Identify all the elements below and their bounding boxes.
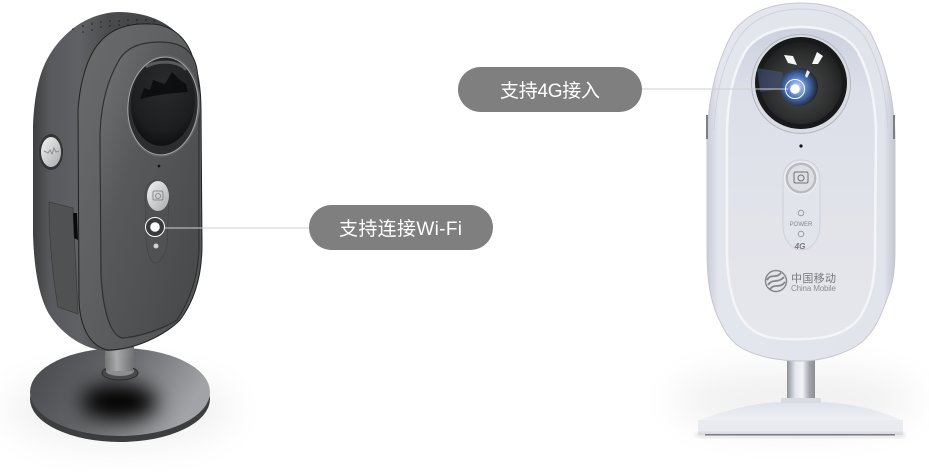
4G pill	[458, 67, 642, 112]
white camera lens	[752, 34, 850, 134]
side buttons	[706, 115, 895, 139]
Wi-Fi pill	[309, 205, 493, 250]
callout: 4G	[458, 67, 804, 112]
white camera shutter button	[785, 162, 817, 194]
4G marker	[786, 80, 804, 98]
white camera mic dot	[799, 144, 803, 148]
Wi-Fi label: 支持连接Wi-Fi	[339, 218, 462, 240]
dark camera card slot	[73, 213, 78, 240]
dark camera mic dot	[158, 165, 160, 167]
white camera front panel	[727, 27, 876, 339]
4G leader line	[641, 88, 788, 90]
power label: POWER	[790, 222, 813, 228]
dark camera	[5, 12, 235, 445]
dark camera front seam	[78, 24, 202, 350]
white camera indicator pill	[783, 160, 820, 250]
callout: Wi-Fi	[146, 205, 493, 250]
white camera ground shadow	[670, 370, 920, 430]
dark camera body	[33, 12, 202, 351]
China Mobile English name: China Mobile	[791, 284, 837, 293]
dark camera indicator recess	[145, 180, 169, 263]
China Mobile Chinese name: 中国移动	[791, 272, 836, 285]
speaker holes	[72, 19, 156, 33]
white camera base	[696, 402, 905, 437]
dark camera stem	[102, 345, 138, 380]
white camera	[670, 3, 920, 437]
dark camera ground shadow	[5, 375, 235, 445]
white camera body	[707, 3, 895, 361]
China Mobile logo mark	[766, 270, 786, 292]
white camera top rim line	[714, 9, 888, 130]
white camera stem	[781, 355, 821, 403]
dark camera lens	[122, 52, 204, 160]
white camera LED 4G	[798, 231, 804, 237]
white camera LED power	[798, 210, 804, 216]
dark camera side button	[39, 134, 63, 170]
4G label: 支持4G接入	[500, 80, 600, 102]
dark camera side door	[49, 202, 78, 314]
dark camera front panel	[100, 42, 199, 338]
dark camera LED	[154, 244, 158, 248]
dark camera shutter button	[147, 181, 169, 211]
Wi-Fi marker	[146, 218, 164, 236]
dark camera round base	[30, 348, 210, 442]
4G label: 4G	[794, 242, 805, 251]
Wi-Fi leader line	[165, 227, 310, 229]
